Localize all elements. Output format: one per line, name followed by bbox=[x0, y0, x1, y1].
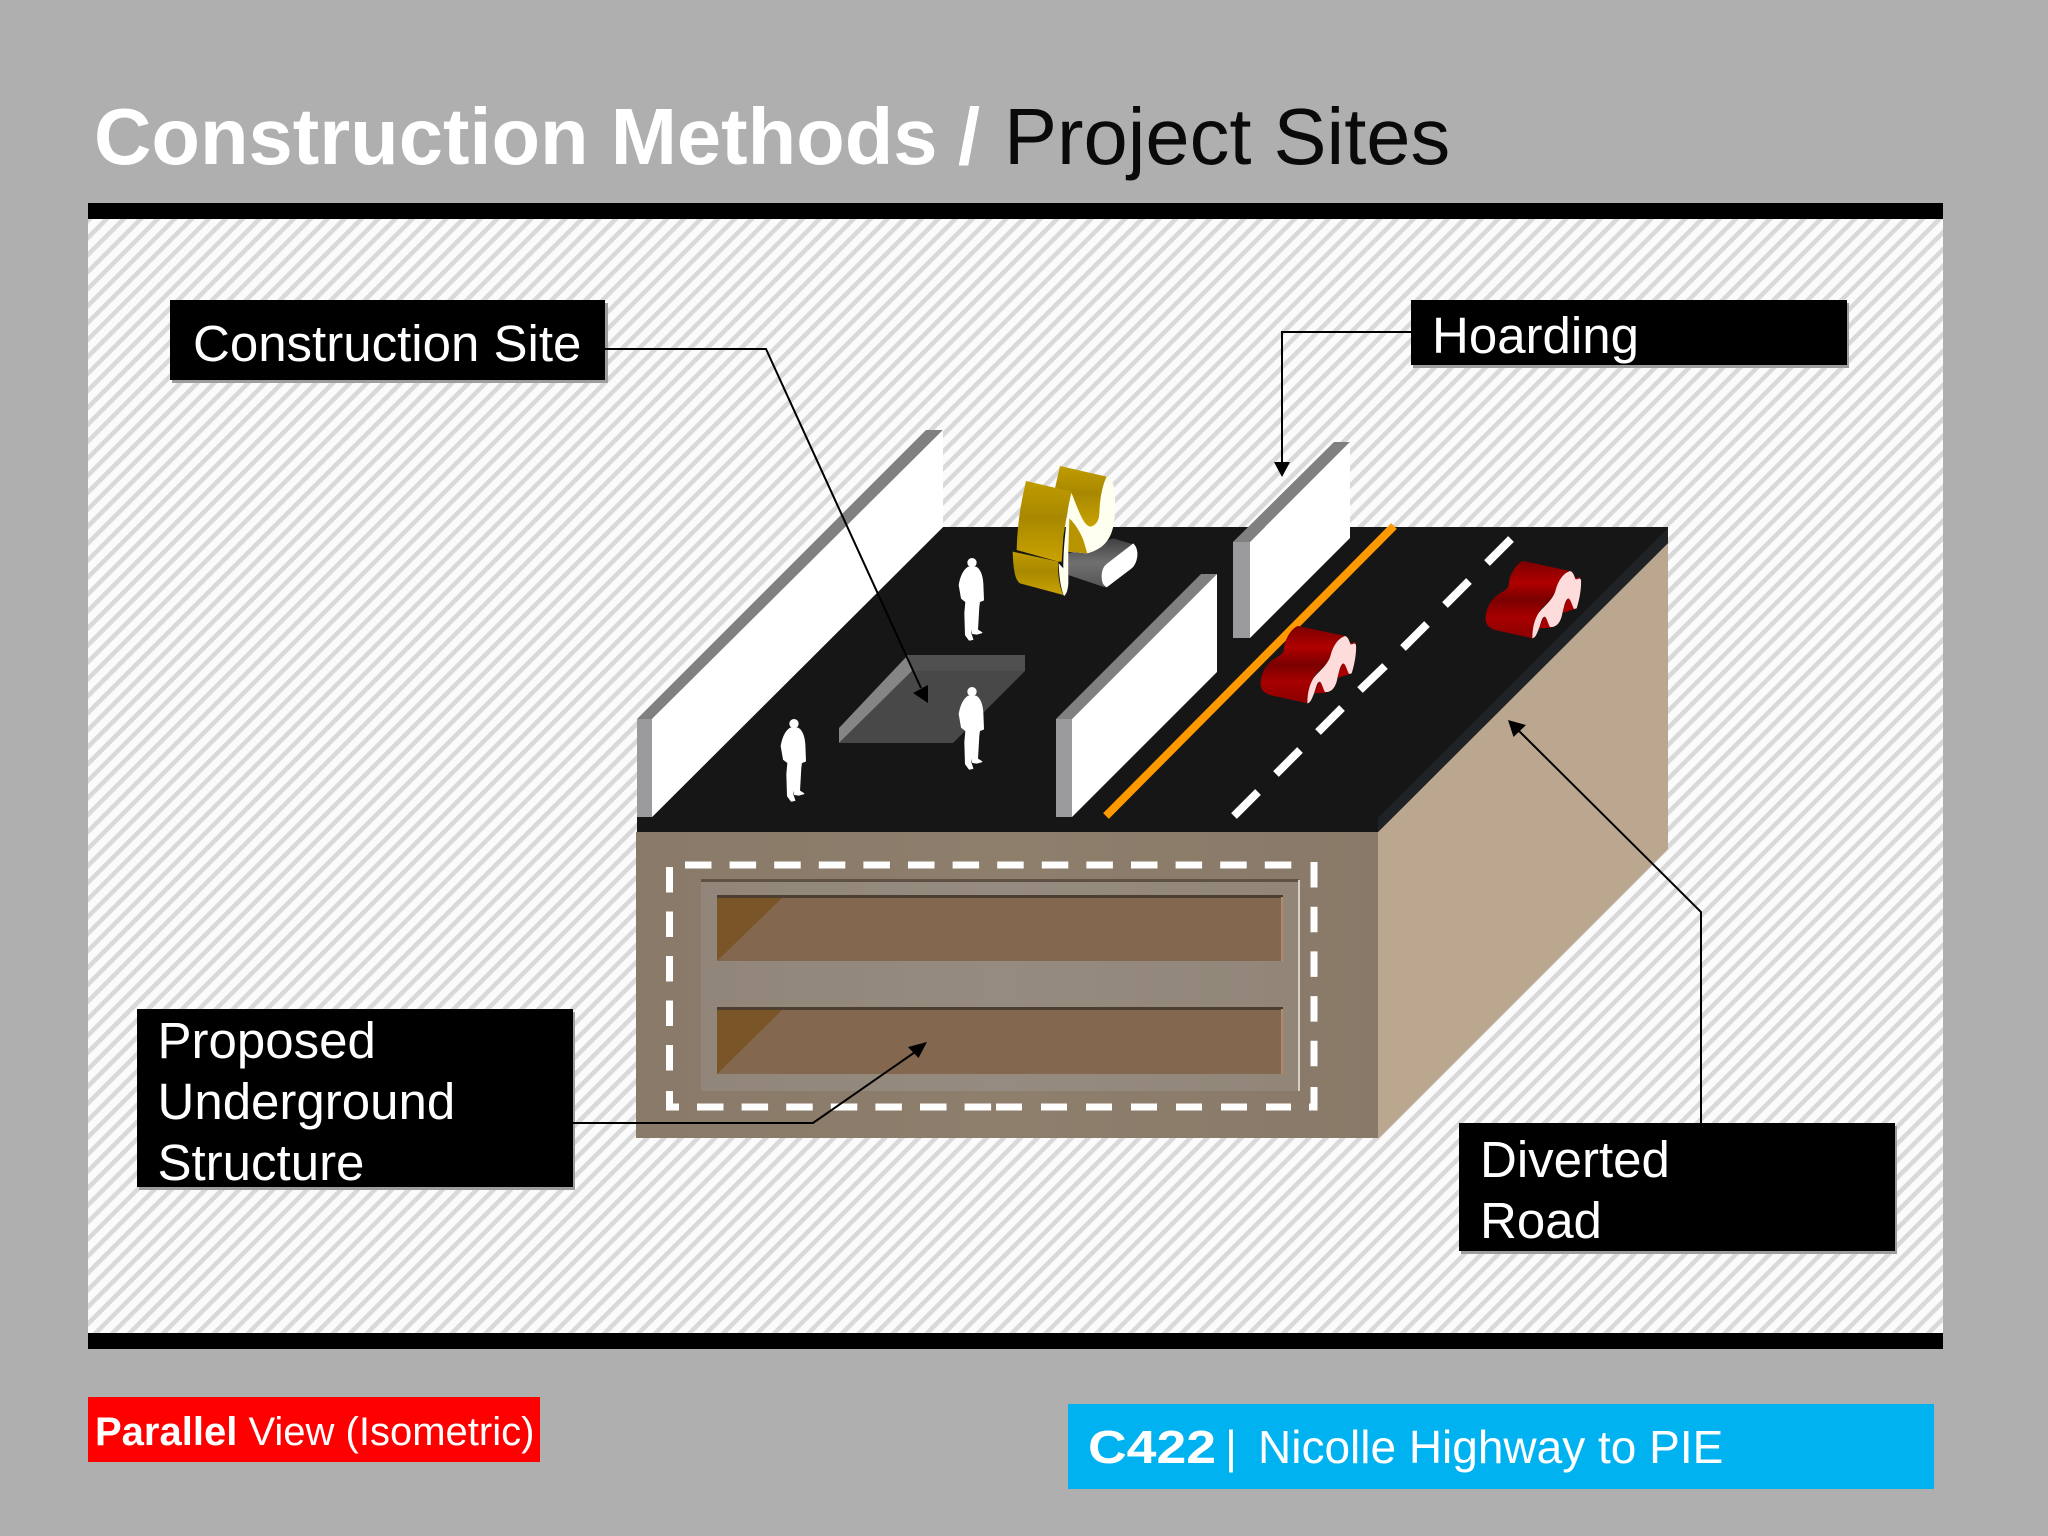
dashed excavation boundary bbox=[670, 862, 1314, 1107]
top road surface bbox=[637, 527, 1668, 832]
road edge strip bbox=[1378, 528, 1668, 832]
label: Proposed Underground Structure: Underground bbox=[158, 1073, 455, 1130]
excavator bbox=[1013, 466, 1137, 596]
hoarding: right wall bbox=[1233, 442, 1350, 638]
road centre dashes bbox=[1234, 539, 1511, 816]
label: Proposed Underground Structure bbox=[137, 1009, 575, 1191]
title: Project Sites bbox=[1004, 92, 1450, 181]
panel: hatched diagram area bbox=[88, 203, 1943, 1349]
worker 2 bbox=[959, 688, 983, 769]
tag: C422 project line: C422 bbox=[1088, 1421, 1216, 1473]
construction pit bbox=[839, 655, 1025, 743]
front of ground block bbox=[636, 832, 1378, 1138]
worker 1 bbox=[959, 559, 983, 640]
hoarding: left wall bbox=[637, 430, 943, 817]
arrow: Underground Structure bbox=[573, 1042, 927, 1123]
tag: C422 project line: | bbox=[1225, 1421, 1237, 1473]
underground structure bbox=[701, 879, 1300, 1091]
label: Diverted Road: Road bbox=[1480, 1192, 1602, 1249]
label: Proposed Underground Structure: Structure bbox=[158, 1134, 364, 1191]
isometric site model bbox=[636, 430, 1668, 1139]
label: Construction Site: Construction Site bbox=[193, 315, 581, 372]
hoarding: middle wall bbox=[1056, 574, 1217, 817]
tag: C422 project line bbox=[1068, 1404, 1934, 1489]
side of ground block bbox=[1378, 540, 1668, 1139]
label: Hoarding: Hoarding bbox=[1432, 307, 1639, 364]
tag: Parallel View: Parallel View (Isometric) bbox=[95, 1410, 534, 1454]
arrow: Hoarding to wall bbox=[1274, 332, 1411, 477]
label: Hoarding bbox=[1411, 300, 1849, 368]
arrow: Diverted Road bbox=[1508, 720, 1701, 1123]
worker 3 bbox=[781, 720, 805, 801]
car 1 bbox=[1261, 626, 1356, 703]
title: / bbox=[958, 92, 980, 181]
car 2 bbox=[1486, 561, 1581, 638]
label: Diverted Road: Diverted bbox=[1480, 1131, 1670, 1188]
tag: Parallel View bbox=[88, 1397, 540, 1462]
label: Construction Site bbox=[170, 300, 608, 383]
tag: C422 project line: Nicolle Highway to PIE bbox=[1258, 1421, 1723, 1473]
label: Diverted Road bbox=[1459, 1123, 1897, 1254]
arrow: Construction Site to pit bbox=[605, 349, 928, 703]
label: Proposed Underground Structure: Proposed bbox=[158, 1012, 376, 1069]
title: Construction Methods bbox=[94, 92, 938, 181]
road edge line bbox=[1106, 526, 1394, 816]
